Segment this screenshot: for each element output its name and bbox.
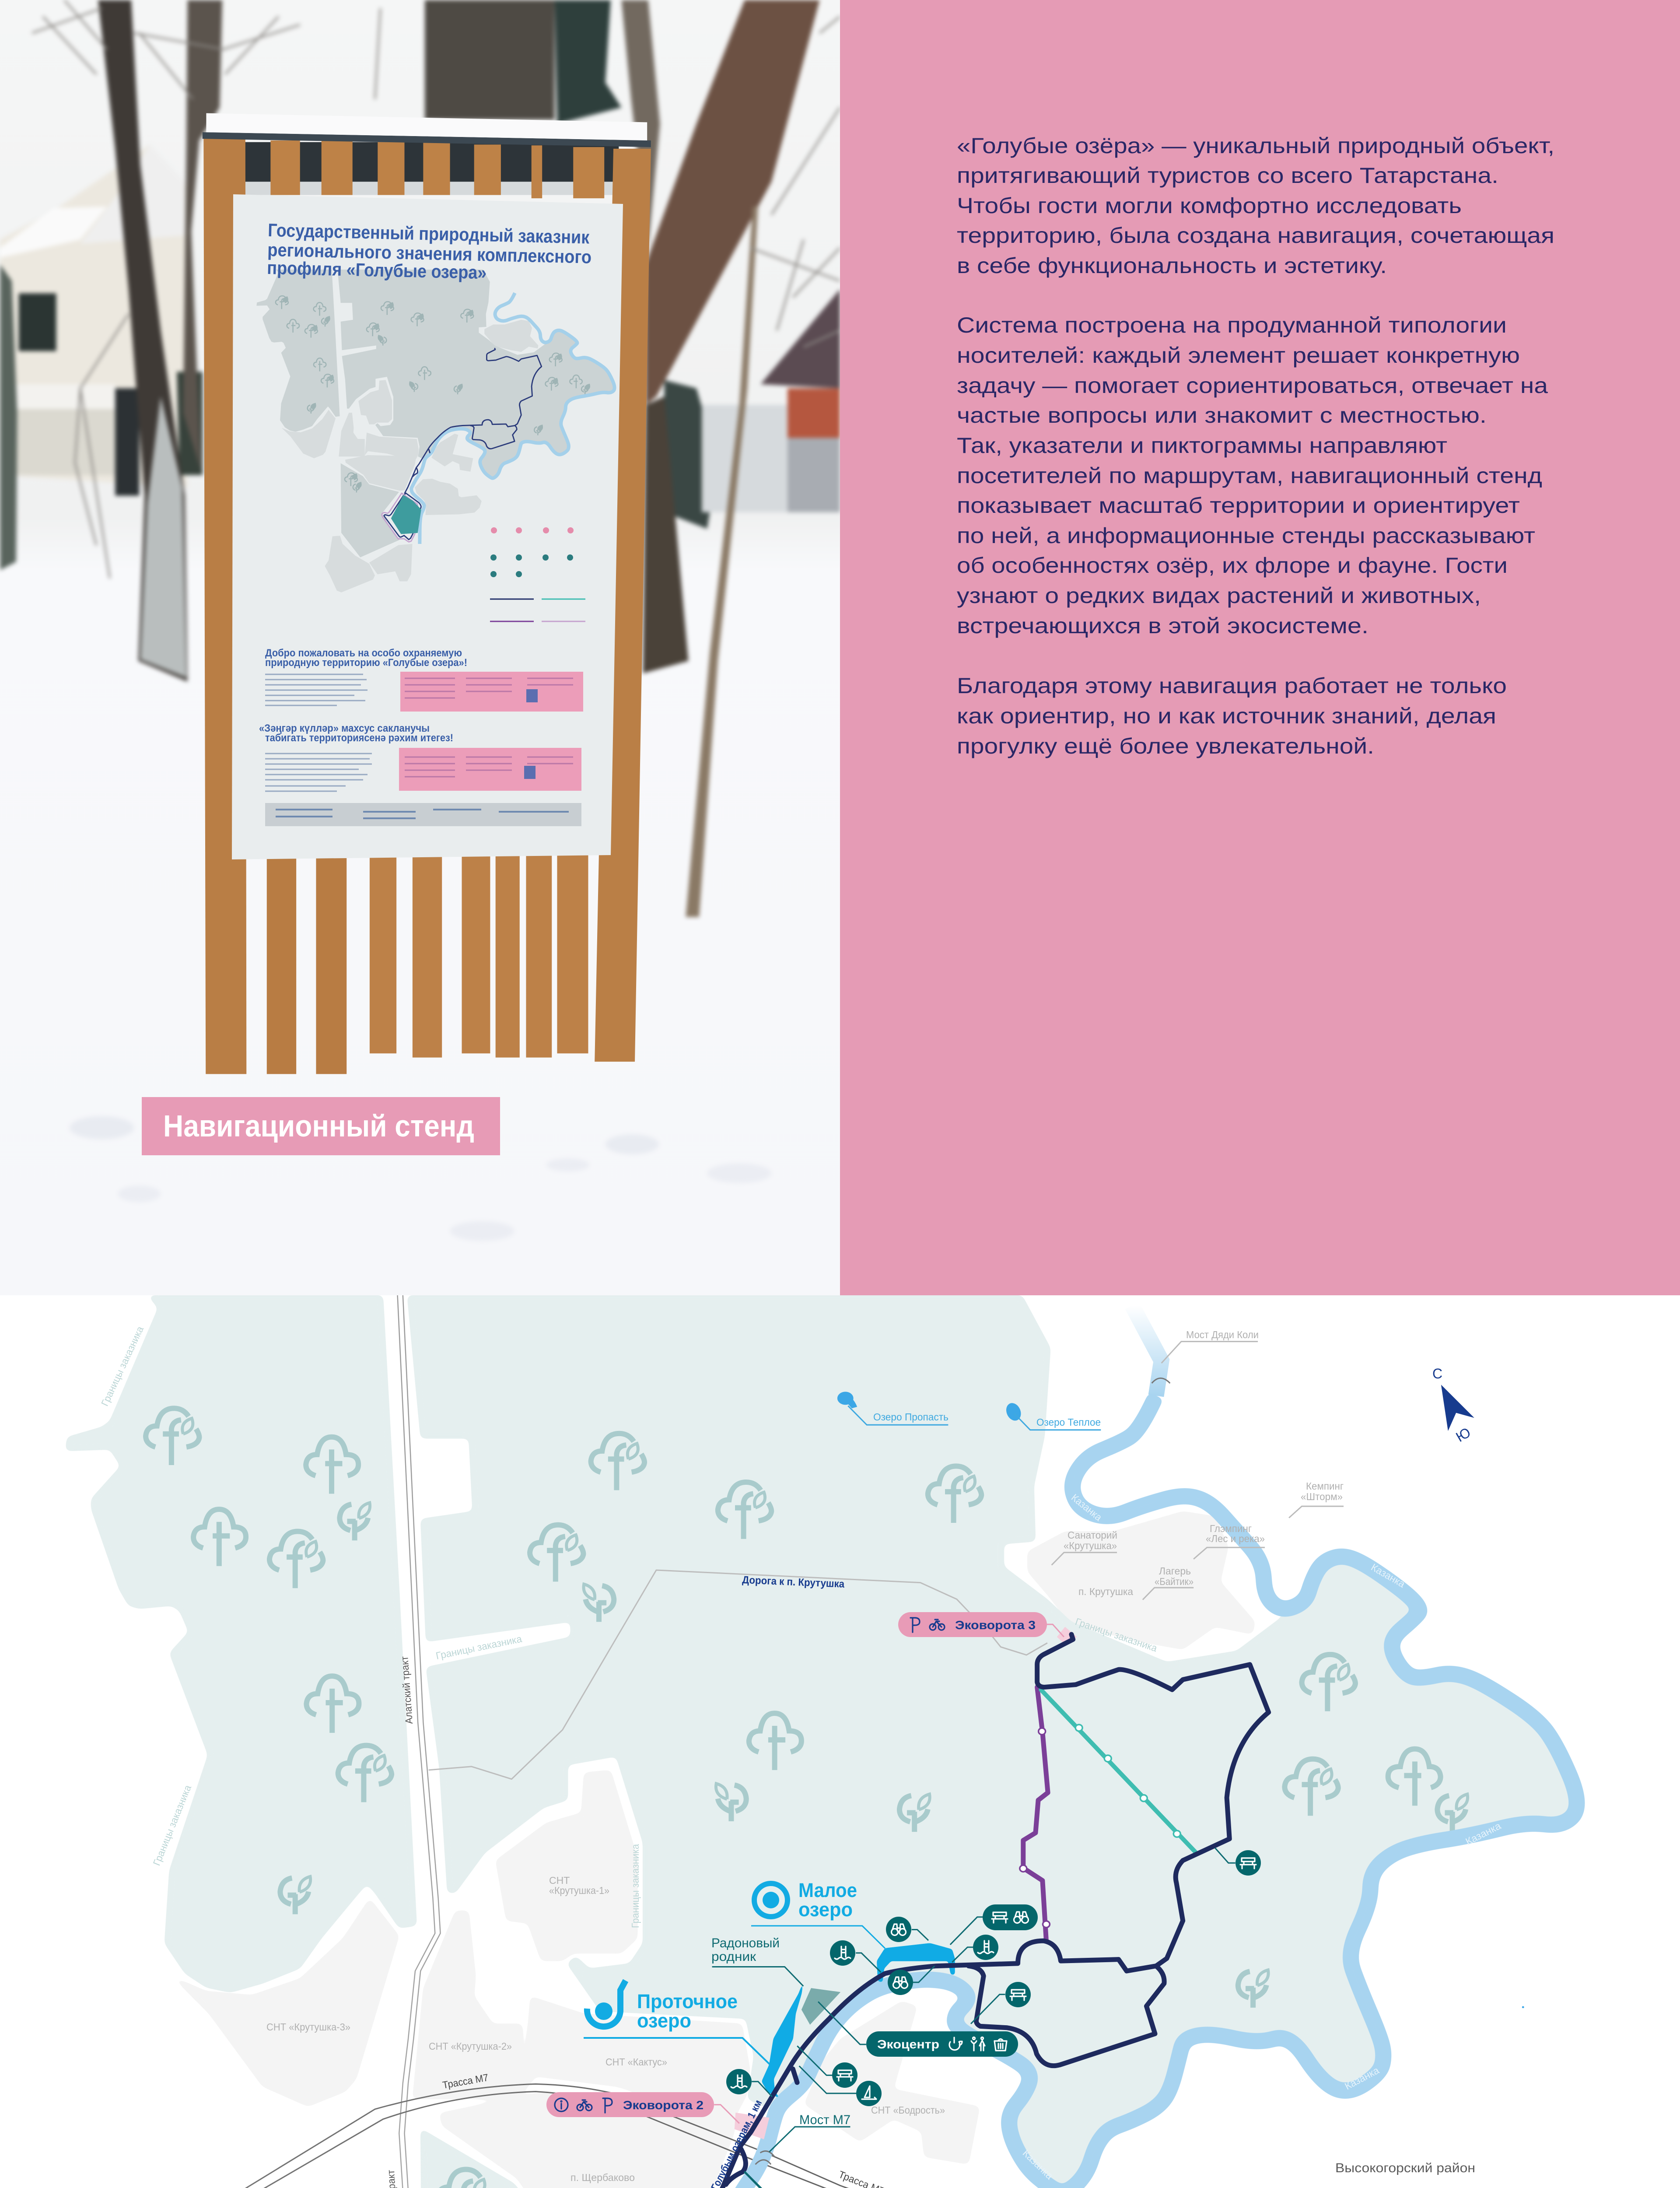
stand panel: welcome text and blocks: «Зәңгәр күлләр» махсус сакланучы: [259, 722, 430, 734]
map labels: reserve borders: Границы заказника: [435, 1633, 523, 1662]
pill: Экоцентр at Small lake: [866, 2031, 1018, 2057]
map labels: small lakes: Озеро Пропасть: [873, 1411, 948, 1423]
map labels: grey places: Санаторий: [1068, 1529, 1117, 1541]
map labels: grey places: «Крутушка-1»: [549, 1885, 609, 1896]
stand panel: miniature map: [256, 270, 616, 593]
description text: показывает масштаб территории и ориентирует: [957, 493, 1520, 518]
map: [65, 1295, 1582, 2188]
trail stops: [658, 1725, 1180, 2188]
map labels: grey places: СНТ: [549, 1875, 570, 1886]
map: small lakes, ecocentres and gates: [679, 1392, 1524, 2188]
map labels: river name: Казанка: [1069, 1492, 1104, 1523]
description text: посетителей по маршрутам, навигационный стенд: [957, 463, 1542, 488]
map: grey place callout lines: [848, 1342, 1344, 1863]
stand panel: heading: регионального значения комплексного: [267, 239, 592, 267]
description text: Система построена на продуманной типологии: [957, 313, 1507, 337]
map: lakes: [654, 1943, 955, 2188]
stand: wooden frame: [203, 113, 651, 1074]
description text: частые вопросы или знакомит с местностью.: [957, 403, 1487, 428]
stand panel: welcome text and blocks: природную территорию «Голубые озера»!: [265, 657, 467, 669]
photo: navigation stand in winter park: [0, 0, 840, 1295]
pill: Эковорота 2: Эковорота 2: [623, 2098, 704, 2112]
map label: district: Высокогорский район: [1335, 2161, 1475, 2175]
description text: Так, указатели и пиктограммы направляют: [957, 433, 1447, 458]
pill: Эковорота 3: [898, 1612, 1047, 1637]
map labels: reserve borders: [99, 1325, 1159, 2188]
map labels: grey places: СНТ «Крутушка-3»: [266, 2021, 350, 2033]
map labels: access roads: Дорога к п. Крутушка: [742, 1574, 845, 1590]
map labels: grey places: СНТ «Крутушка-2»: [429, 2041, 512, 2052]
map labels: grey places: СНТ «Кактус»: [606, 2056, 667, 2068]
stand panel: welcome text and blocks: [259, 527, 585, 826]
lake title: Проточное озеро: озеро: [637, 2009, 691, 2032]
map: callout lines upper: [712, 1917, 1005, 2188]
map labels: teal feature names: родник: [711, 1950, 756, 1964]
map service markers: [609, 1850, 1261, 2188]
map: river fading ends: [754, 1305, 1170, 2188]
description text: «Голубые озёра» — уникальный природный объект,: [957, 133, 1554, 158]
description text: по ней, а информационные стенды рассказывают: [957, 523, 1535, 548]
map labels: reserve borders: Границы заказника: [151, 1783, 193, 1867]
pill: Эковорота 2: [546, 2092, 714, 2117]
map labels: grey places: «Байтик»: [1155, 1576, 1194, 1587]
icon: compass arrow: Ю: [1453, 1424, 1473, 1445]
map labels: reserve borders: Границы заказника: [630, 1844, 641, 1928]
map: callout lines lower: [438, 2105, 840, 2188]
map labels: grey places: Глэмпинг: [1210, 1523, 1252, 1534]
map labels: river name: Казанка: [1021, 2147, 1056, 2181]
lake title: Проточное озеро: [584, 1981, 770, 2065]
map: settlements (grey areas): [172, 1511, 1255, 2188]
lake title: Проточное озеро: Проточное: [637, 1990, 738, 2013]
map labels: grey places: «Шторм»: [1301, 1491, 1343, 1502]
map labels: roads: Трасса М7: [441, 2072, 489, 2091]
map: trails: [595, 1634, 1269, 2188]
description text: Чтобы гости могли комфортно исследовать: [957, 193, 1462, 218]
stand panel: welcome text and blocks: Добро пожаловать на особо охраняемую: [265, 647, 462, 659]
map labels: teal feature names: Радоновый: [711, 1936, 780, 1950]
map labels: reserve borders: Границы заказника: [99, 1325, 146, 1408]
map: tree icons: [146, 1408, 1468, 2188]
lake title: Малое озеро: Малое: [798, 1879, 857, 1901]
map labels: grey places: «Лес и река»: [1206, 1533, 1265, 1544]
lake title: Малое озеро: [754, 1879, 857, 1921]
map labels: grey places: «Крутушка»: [1064, 1540, 1117, 1551]
sports trail: [1041, 1690, 1196, 1853]
description text: встречающихся в этой экосистеме.: [957, 614, 1368, 638]
description text: территорию, была создана навигация, сочетающая: [957, 223, 1554, 248]
description text: об особенностях озёр, их флоре и фауне. Гости: [957, 553, 1508, 578]
stand panel: heading: [267, 220, 592, 285]
map labels: river name: Казанка: [1463, 1820, 1503, 1847]
description text: прогулку ещё более увлекательной.: [957, 734, 1374, 758]
description text: узнают о редких видах растений и животных,: [957, 583, 1481, 608]
map labels: roads: [349, 1656, 1308, 2188]
lake title: Малое озеро: озеро: [798, 1898, 853, 1921]
description text: как ориентир, но и как источник знаний, делая: [957, 704, 1496, 728]
map labels: reserve borders: Границы заказника: [1074, 1616, 1159, 1654]
map labels: teal feature names: [711, 1936, 853, 2188]
map: forest areas of the reserve: [65, 1295, 1582, 2188]
description text: задачу — помогает сориентироваться, отвечает на: [957, 373, 1548, 398]
pill: Эковорота 3: Эковорота 3: [955, 1618, 1036, 1632]
map labels: river name: Казанка: [1343, 2064, 1381, 2092]
map labels: river name: [712, 1492, 1503, 2188]
map labels: grey places: п. Крутушка: [1078, 1586, 1133, 1597]
map labels: access roads: [508, 1574, 845, 2188]
description text: [957, 133, 1554, 758]
map labels: grey places: [266, 1329, 1344, 2188]
caption label: Навигационный стенд: [163, 1109, 474, 1143]
description text: притягивающий туристов со всего Татарстана.: [957, 163, 1498, 188]
stand panel: heading: профиля «Голубые озера»: [267, 257, 487, 283]
map labels: grey places: СНТ «Бодрость»: [871, 2104, 945, 2116]
map labels: grey places: Лагерь: [1159, 1565, 1191, 1577]
description text: в себе функциональность и эстетику.: [957, 253, 1387, 278]
stand: information panel: [232, 194, 623, 859]
map labels: small lakes: [873, 1411, 1101, 1428]
map: Kazanka river: [719, 1396, 1577, 2188]
map labels: grey places: Кемпинг: [1306, 1480, 1344, 1492]
icon: compass arrow: С: [1432, 1366, 1442, 1382]
pill: Экоцентр at Small lake: Экоцентр: [877, 2037, 939, 2051]
photo background: sky and snow: [0, 0, 840, 1295]
stand panel: heading: Государственный природный заказник: [268, 220, 590, 248]
map labels: teal feature names: Мост М7: [799, 2113, 850, 2127]
interactive trail: [1023, 1687, 1048, 1941]
description text: Благодаря этому навигация работает не только: [957, 673, 1507, 698]
photo scene: trees and buildings: [0, 0, 840, 1241]
map labels: grey places: Мост Дяди Коли: [1186, 1329, 1259, 1340]
caption label: [142, 1097, 500, 1155]
panel: description: [840, 0, 1680, 1295]
educational trail: [604, 1634, 1269, 2188]
map labels: small lakes: Озеро Теплое: [1036, 1417, 1101, 1428]
stand panel: welcome text and blocks: табигать территориясенә рәхим итегез!: [265, 732, 453, 744]
map: roads: [121, 1295, 1496, 2188]
map labels: roads: Алатский тракт: [399, 1656, 415, 1724]
pill: rest and viewpoint upper: [983, 1904, 1038, 1930]
icon: compass arrow: [1432, 1366, 1474, 1445]
description text: носителей: каждый элемент решает конкретную: [957, 343, 1520, 368]
map labels: river name: Казанка: [1369, 1561, 1407, 1590]
map labels: grey places: п. Щербаково: [570, 2172, 635, 2183]
